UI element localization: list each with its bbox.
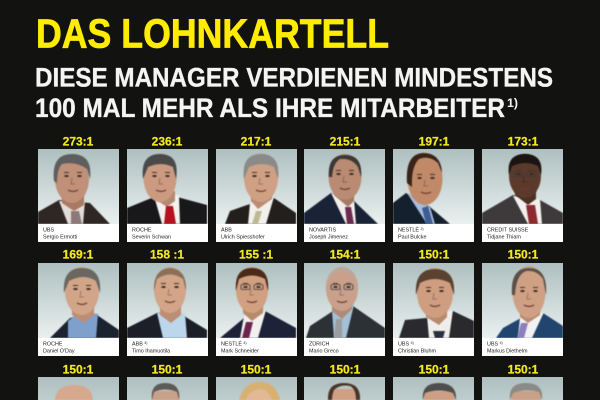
card: Paul Bulcke	[393, 135, 474, 242]
portrait: Joseph Jimenez	[304, 149, 385, 224]
card: row 3, column 1	[38, 362, 119, 400]
card: Markus Diethelm: Markus Diethelm	[487, 349, 528, 355]
card: Severin Schwan: 236:1	[152, 135, 183, 149]
card: row 3, column 5	[393, 362, 474, 400]
card: Severin Schwan	[127, 135, 208, 242]
portrait: Markus Diethelm	[482, 263, 563, 338]
card: Ulrich Spiesshofer: ABB	[221, 227, 232, 233]
subtitle	[35, 62, 553, 123]
card: row 3, column 3	[216, 362, 297, 400]
card: Timo Ihamuotila: Timo Ihamuotila	[132, 349, 170, 355]
card: Markus Diethelm: 150:1	[508, 248, 539, 262]
card: row 3, column 6: 150:1	[508, 362, 539, 376]
card: Paul Bulcke: NESTLÉ	[398, 227, 419, 233]
card: Mark Schneider: 4)	[243, 341, 247, 345]
portrait: Daniel O'Day	[38, 263, 119, 338]
card: Markus Diethelm	[482, 248, 563, 356]
portrait: Severin Schwan	[127, 149, 208, 224]
card: Tidjane Thiam: Tidjane Thiam	[487, 234, 521, 240]
portrait: Timo Ihamuotila	[127, 263, 208, 338]
card: Sergio Ermotti: UBS	[43, 227, 54, 233]
card: Tidjane Thiam	[482, 135, 563, 242]
card: Sergio Ermotti: Sergio Ermotti	[43, 234, 77, 240]
card: Christian Bluhm: UBS	[398, 342, 409, 348]
portrait: Sergio Ermotti	[38, 149, 119, 224]
card: row 3, column 2	[127, 362, 208, 400]
subtitle: 1)	[507, 96, 518, 110]
title: DAS LOHNKARTELL	[36, 10, 389, 56]
portrait: Christian Bluhm	[393, 263, 474, 338]
card: Christian Bluhm	[393, 248, 474, 356]
portrait: Tidjane Thiam	[482, 149, 563, 224]
card: row 3, column 4	[304, 362, 385, 400]
card: Timo Ihamuotila	[127, 248, 208, 356]
card: Christian Bluhm: 150:1	[419, 248, 450, 262]
card: Timo Ihamuotila: ABB	[132, 342, 143, 348]
card: Mario Greco: ZÜRICH	[309, 341, 329, 348]
portrait: Mark Schneider	[216, 263, 297, 338]
card: Mark Schneider	[216, 248, 297, 356]
card: Paul Bulcke: 197:1	[419, 135, 450, 149]
card: Markus Diethelm: UBS	[487, 342, 498, 348]
card: Ulrich Spiesshofer: 217:1	[241, 135, 272, 149]
card: Sergio Ermotti: 273:1	[63, 135, 94, 149]
card: Tidjane Thiam: CREDIT SUISSE	[487, 227, 529, 233]
card: Mario Greco: 154:1	[330, 248, 361, 262]
card: Severin Schwan: ROCHE	[132, 227, 152, 233]
portrait: balding man	[304, 377, 385, 400]
subtitle: DIESE MANAGER VERDIENEN MINDESTENS	[35, 62, 553, 92]
card: Christian Bluhm: 4)	[411, 341, 414, 345]
card: row 3, column 6	[482, 362, 563, 400]
card: Mario Greco	[304, 248, 385, 356]
card: Paul Bulcke: Paul Bulcke	[398, 234, 426, 240]
card: Joseph Jimenez	[304, 135, 385, 242]
card: row 3, column 3: 150:1	[241, 362, 272, 376]
card: Ulrich Spiesshofer	[216, 135, 297, 242]
card: Christian Bluhm: Christian Bluhm	[398, 349, 437, 355]
card: Daniel O'Day	[38, 248, 119, 356]
card: Daniel O'Day: ROCHE	[43, 342, 63, 348]
card: Mark Schneider: 155 :1	[239, 248, 273, 262]
card: Severin Schwan: Severin Schwan	[132, 234, 171, 240]
card: Joseph Jimenez: Joseph Jimenez	[309, 234, 348, 240]
card: Timo Ihamuotila: 158 :1	[150, 248, 184, 262]
portrait: Ulrich Spiesshofer	[216, 149, 297, 224]
card: Tidjane Thiam: 173:1	[508, 135, 539, 149]
card: row 3, column 1: 150:1	[63, 362, 94, 376]
card: Daniel O'Day: Daniel O'Day	[43, 349, 75, 355]
card: Markus Diethelm: 4)	[500, 341, 503, 345]
portrait: blonde woman	[216, 377, 297, 400]
subtitle: 100 MAL MEHR ALS IHRE MITARBEITER	[35, 93, 505, 123]
card: Mark Schneider: Mark Schneider	[221, 349, 259, 355]
portrait: Mario Greco	[304, 263, 385, 338]
card: Joseph Jimenez: NOVARTIS	[309, 227, 336, 233]
card: Mark Schneider: NESTLÉ	[221, 342, 242, 348]
portrait: Paul Bulcke	[393, 149, 474, 224]
card: Joseph Jimenez: 215:1	[330, 135, 361, 149]
portrait: grey-haired man	[127, 377, 208, 400]
card: row 3, column 5: 150:1	[419, 362, 450, 376]
card: Daniel O'Day: 169:1	[63, 248, 94, 262]
card: Ulrich Spiesshofer: Ulrich Spiesshofer	[221, 234, 265, 240]
portrait: grey-haired man	[482, 377, 563, 400]
card: Mario Greco: Mario Greco	[309, 349, 339, 355]
card: Paul Bulcke: 2)	[420, 227, 424, 231]
card: row 3, column 2: 150:1	[152, 362, 183, 376]
card: row 3, column 4: 150:1	[330, 362, 361, 376]
portrait: dark-grey-haired man	[393, 377, 474, 400]
card: Sergio Ermotti	[38, 135, 119, 242]
portrait: bald man	[38, 377, 119, 400]
card: Timo Ihamuotila: 3)	[144, 341, 147, 345]
